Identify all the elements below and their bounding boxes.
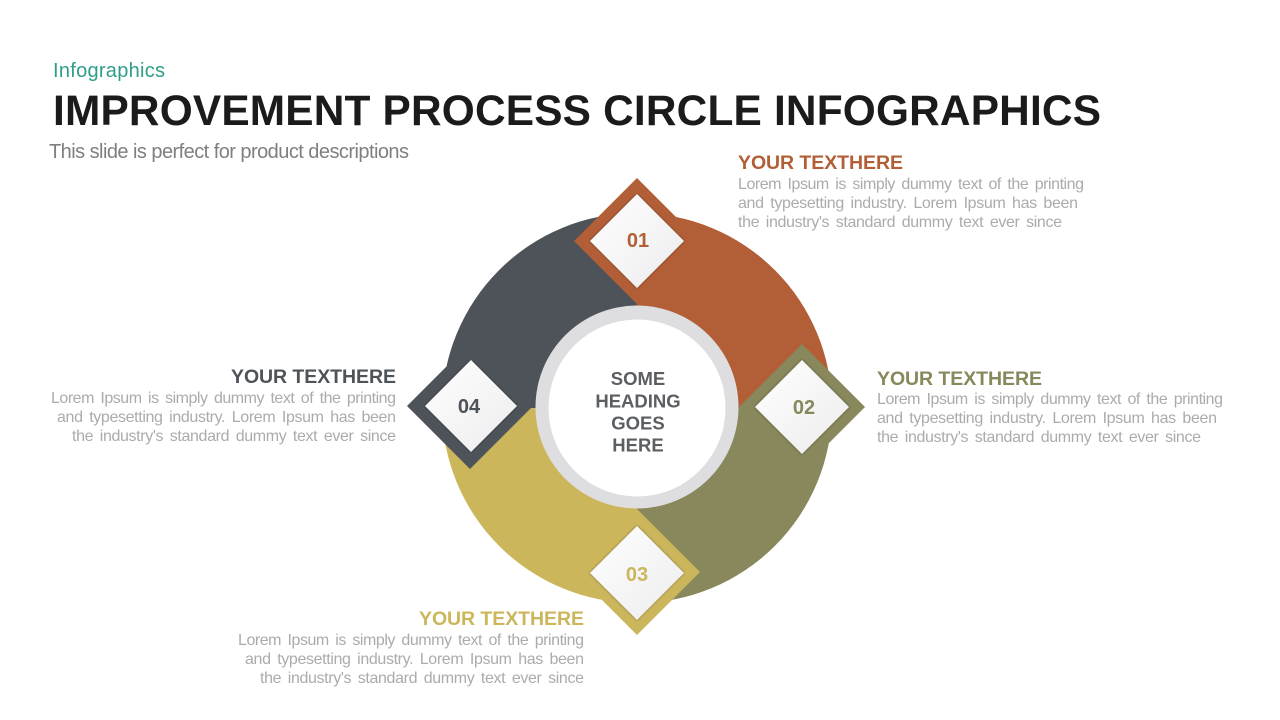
text block 04 (51, 366, 396, 445)
segment 01 brown (637, 213, 832, 408)
text block 01: the industry's standard dummy text ever since (738, 214, 1062, 231)
text block 01 (738, 152, 1084, 231)
text block 02 (877, 368, 1223, 446)
text block 04: the industry's standard dummy text ever since (72, 428, 396, 445)
badge 03: 03 (626, 564, 648, 586)
badge 02: 02 (793, 397, 815, 419)
badge 01: 01 (627, 230, 649, 252)
text block 03: Lorem Ipsum is simply dummy text of the printing (238, 632, 584, 649)
circle diagram (407, 178, 865, 635)
text block 04: and typesetting industry. Lorem Ipsum has been (57, 409, 396, 426)
center ring (536, 306, 738, 508)
center heading: GOES (611, 412, 665, 434)
badge 02 (755, 360, 849, 454)
text block 01: YOUR TEXTHERE (738, 152, 903, 174)
text block 04: Lorem Ipsum is simply dummy text of the printing (51, 390, 396, 407)
center disc (548, 320, 726, 496)
title: IMPROVEMENT PROCESS CIRCLE INFOGRAPHICS (53, 87, 1101, 134)
badge 04: 04 (458, 396, 481, 418)
text block 03 (238, 608, 584, 687)
text block 01: Lorem Ipsum is simply dummy text of the printing (738, 176, 1084, 193)
eyebrow label: Infographics (53, 60, 165, 82)
badge 04 (425, 360, 517, 452)
center heading: HERE (612, 434, 664, 456)
text block 02: and typesetting industry. Lorem Ipsum has been (877, 410, 1217, 427)
center heading: SOME (611, 368, 665, 389)
segment 03 yellow (442, 408, 637, 603)
text block 02: the industry's standard dummy text ever since (877, 429, 1201, 446)
badge 03 (590, 526, 684, 620)
segment 04 dark (442, 213, 637, 408)
diamond frame 04 (407, 343, 533, 469)
badge 01 (590, 194, 684, 288)
text block 03: the industry's standard dummy text ever since (260, 670, 584, 687)
center heading: HEADING (595, 390, 681, 412)
segment 02 olive (637, 408, 832, 603)
text block 04: YOUR TEXTHERE (231, 366, 396, 388)
text block 03: and typesetting industry. Lorem Ipsum has been (245, 651, 584, 668)
diamond frame 02 (739, 344, 865, 470)
text block 03: YOUR TEXTHERE (419, 608, 584, 630)
subtitle: This slide is perfect for product descriptions (49, 141, 409, 163)
text block 02: YOUR TEXTHERE (877, 368, 1042, 390)
text block 02: Lorem Ipsum is simply dummy text of the printing (877, 391, 1223, 408)
diamond frame 01 (574, 178, 700, 304)
diamond frame 03 (574, 509, 700, 635)
text block 01: and typesetting industry. Lorem Ipsum has been (738, 195, 1078, 212)
center heading (595, 368, 681, 456)
